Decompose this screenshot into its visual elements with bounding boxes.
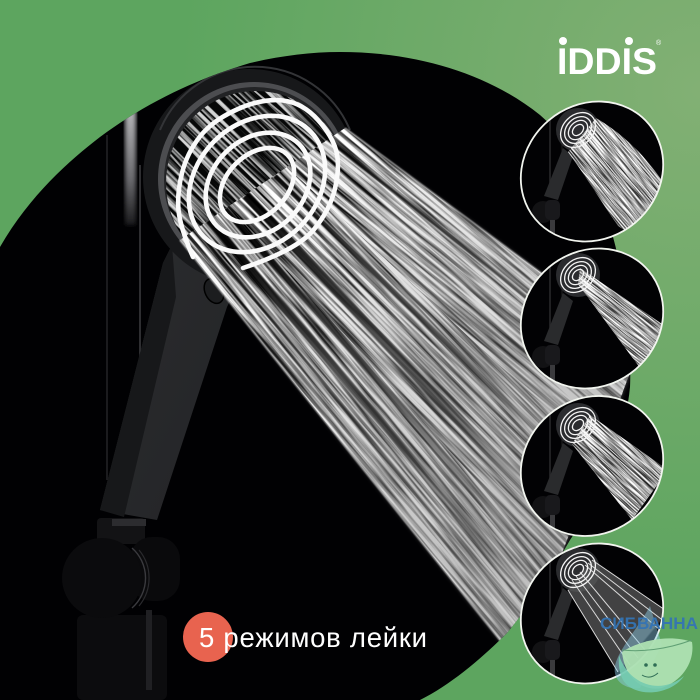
water streams — [180, 128, 640, 665]
inset 4: sparse wide mode — [520, 542, 664, 684]
vertical shower rod — [107, 110, 140, 480]
wall bracket and hose — [62, 518, 180, 700]
logo: IDDIS — [557, 41, 657, 82]
watermark mascot — [615, 606, 692, 692]
watermark text: СИБВАННА — [600, 615, 698, 633]
logo: ® — [656, 39, 662, 47]
caption: 5 режимов лейки — [199, 622, 427, 653]
water streaks over the head face — [166, 91, 334, 268]
water texture fan — [180, 128, 629, 640]
badge circle — [183, 612, 233, 662]
dark gaps between water streams — [196, 139, 628, 633]
shower head body — [143, 67, 357, 307]
far water mist — [231, 158, 630, 642]
inset 1: wide rain mode — [520, 100, 664, 242]
spiral light rings — [176, 98, 340, 270]
inset 2: narrow jet mode — [520, 248, 664, 390]
water lines crossing the head face — [166, 91, 329, 234]
inset 3: massage mode — [520, 395, 664, 537]
handle — [100, 245, 240, 520]
